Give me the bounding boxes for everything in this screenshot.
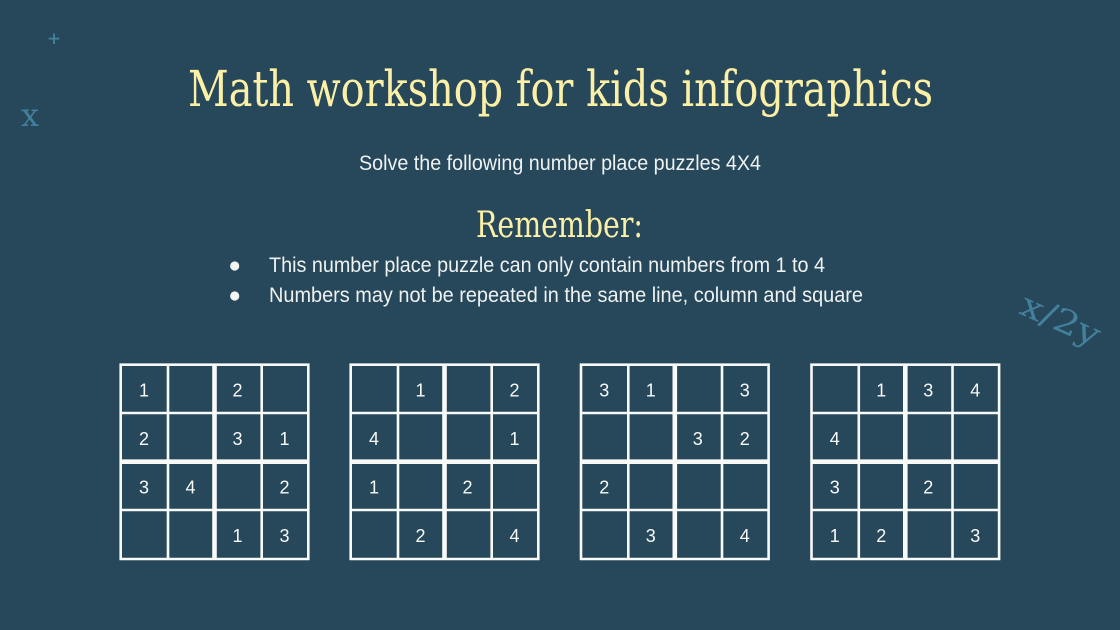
- puzzle grid 2: 1: [415, 380, 426, 400]
- puzzle grid 2: 1: [509, 429, 520, 449]
- rule 2 text: Numbers may not be repeated in the same line, column and square: [269, 284, 863, 307]
- puzzle grid 1: 3: [232, 429, 243, 449]
- puzzle grid 3: [580, 364, 769, 560]
- puzzle grid 3: 2: [599, 478, 609, 498]
- puzzle grid 3: 3: [599, 380, 609, 400]
- puzzle grid 1: 1: [232, 526, 243, 546]
- puzzle grid 4: 4: [970, 380, 980, 400]
- puzzle grid 3: 1: [646, 380, 656, 400]
- puzzle grid 2: 2: [415, 526, 426, 546]
- puzzle grid 4: 3: [923, 380, 933, 400]
- decoration: x/2y formula: x/2y: [1014, 285, 1107, 355]
- puzzle grid 1: 3: [279, 526, 290, 546]
- puzzle grid 4: 4: [830, 429, 840, 449]
- puzzle grid 1: [120, 364, 309, 560]
- puzzle grid 2: 2: [509, 380, 520, 400]
- puzzle grid 2: 1: [369, 478, 379, 498]
- puzzle grid 1: 2: [232, 380, 243, 400]
- heading: remember: Remember:: [476, 205, 643, 246]
- puzzle grid 2: 4: [509, 526, 520, 546]
- puzzle grid 4: 1: [876, 380, 886, 400]
- puzzle grid 2: 4: [369, 429, 379, 449]
- puzzle grid 1: 2: [279, 478, 290, 498]
- puzzle grid 2: [350, 364, 539, 560]
- decoration: plus sign: +: [47, 29, 61, 49]
- rule 1 text: This number place puzzle can only contain numbers from 1 to 4: [269, 254, 825, 277]
- puzzle grid 3: 3: [646, 526, 656, 546]
- puzzle grid 4: 1: [830, 526, 840, 546]
- puzzle grid 3: 3: [693, 429, 703, 449]
- puzzle grid 4: 2: [876, 526, 886, 546]
- bullet 2: [230, 291, 239, 301]
- puzzle grid 1: 1: [279, 429, 290, 449]
- puzzle grid 1: 1: [139, 380, 149, 400]
- puzzle grid 4: 2: [923, 478, 933, 498]
- puzzle grid 3: 2: [740, 429, 750, 449]
- title: Math workshop for kids infographics: [188, 60, 933, 118]
- rules list: [230, 254, 863, 307]
- puzzle grid 1: 4: [185, 478, 196, 498]
- puzzle grid 1: 2: [139, 429, 149, 449]
- puzzle grid 2: 2: [462, 478, 473, 498]
- bullet 1: [230, 261, 239, 271]
- puzzle grid 3: 3: [740, 380, 750, 400]
- puzzle grid 4: [811, 364, 1000, 560]
- subtitle: Solve the following number place puzzles 4X4: [359, 152, 761, 175]
- puzzle grid 1: 3: [139, 478, 149, 498]
- puzzle grid 3: 4: [740, 526, 750, 546]
- decoration: letter x: x: [21, 96, 39, 134]
- puzzle grid 4: 3: [830, 478, 840, 498]
- puzzle grid 4: 3: [970, 526, 980, 546]
